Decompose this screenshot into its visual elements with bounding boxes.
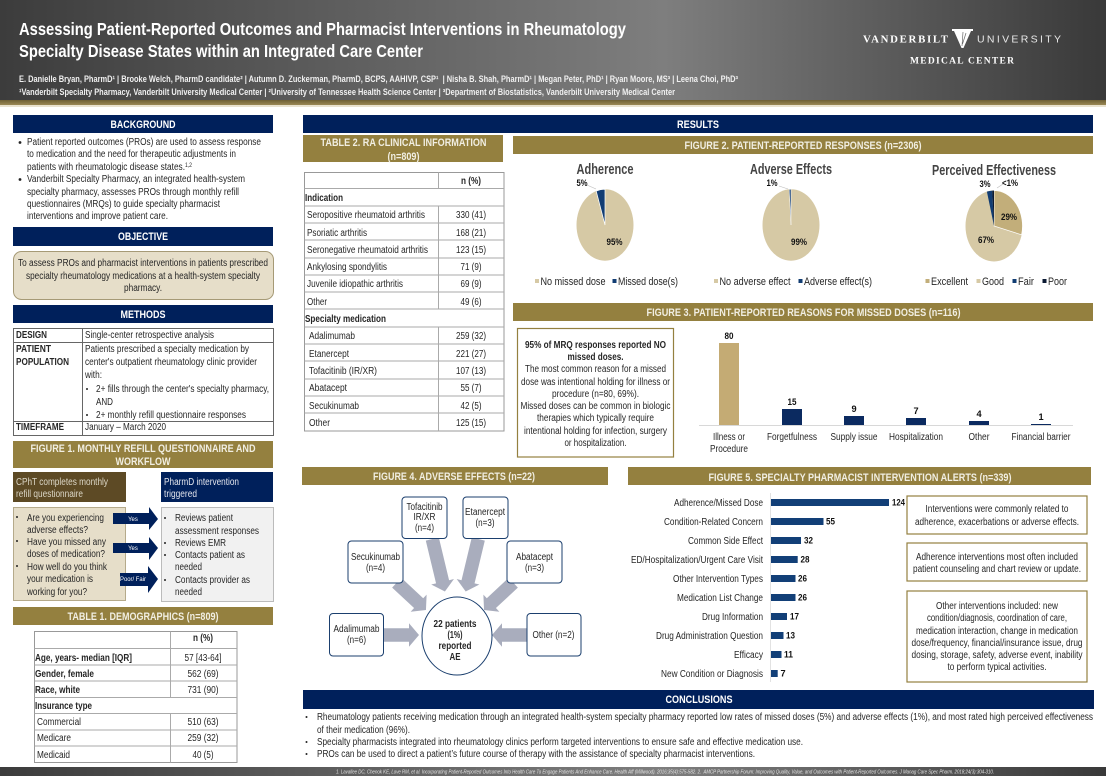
demographics table: Medicaid: [37, 750, 70, 761]
background text: interventions and improve patient care.: [27, 211, 168, 222]
node: Other: [527, 614, 581, 656]
conclusions text: Specialty pharmacists integrated into rheumatology clinics perform targeted interventions to ensure safe and effective medication use.: [317, 737, 803, 748]
heading: figure 1: WORKFLOW: [116, 456, 171, 468]
pie chart: perceived effectiveness: Fair: [1018, 276, 1034, 288]
clinical information table: 42 (5): [460, 401, 482, 412]
horizontal bar chart: intervention types: 26: [798, 592, 807, 602]
heading: methods: METHODS: [120, 309, 166, 321]
objective callout: specialty rheumatology medications at a health-system specialty: [26, 271, 260, 282]
clinical information table: 69 (9): [460, 279, 482, 290]
objective callout: pharmacy.: [124, 283, 162, 294]
panel: background: [13, 115, 273, 222]
title: Specialty Disease States within an Integrated Care Center: [19, 41, 423, 61]
node: Adalimumab: [330, 614, 384, 656]
demographics table: 40 (5): [192, 750, 214, 761]
footer references: 1. Lavallee DC, Chenok KE, Love RM, et al. Incorporating Patient-Reported Outcomes Into Health Care To Engage Patients And Enhance Care. Health Aff (Millwood). 2016;35(4):575-582. 2. AMCP Partnership Forum: Improving Quality, Value, and Outcomes with Patient-Reported Outcomes. J Manag Care Spec Pharm. 2018;24(3):304-310.: [336, 770, 994, 776]
background text: questionnaires (MRQs) to guide specialty pharmacist: [27, 199, 220, 210]
node: Etanercept: Etanercept: [465, 507, 505, 518]
header banner: [0, 0, 1106, 107]
pie chart: adverse effects: No adverse effect: [720, 276, 791, 288]
demographics table: Gender, female: [35, 669, 94, 680]
CPhT box: [13, 472, 126, 502]
callout: common interventions: Interventions were commonly related to: [926, 504, 1069, 515]
pharmacist actions: Contacts patient as: [175, 550, 245, 561]
heading: background: BACKGROUND: [110, 119, 176, 131]
callout: other interventions: condition/diagnosis, coordination of care,: [927, 613, 1067, 624]
node: Tofacitinib: Tofacitinib: [406, 502, 443, 513]
bar chart: reasons for missed doses: 7: [913, 406, 919, 416]
authors: E. Danielle Bryan, PharmD¹ | Brooke Welch, PharmD candidate² | Autumn D. Zuckerman, PharmD, BCPS, AAHIVP, CSP¹ | Nisha B. Shah, PharmD¹ | Megan Peter, PhD¹ | Ryan Moore, MS³ | Leena Choi, PhD³: [19, 74, 738, 84]
background text: specialty pharmacy, assesses PROs through monthly refill: [27, 187, 239, 198]
node: Adalimumab: Adalimumab: [334, 624, 380, 635]
heading: figure 5: FIGURE 5. SPECIALTY PHARMACIST INTERVENTION ALERTS (n=339): [708, 472, 1012, 484]
pie chart: perceived effectiveness: 67%: [978, 235, 994, 245]
heading: figure 1: [30, 443, 256, 468]
arrows into center: [383, 536, 527, 647]
arrow: yes adverse effects: Yes: [128, 517, 138, 523]
methods table: 2+ monthly refill questionnaire responses: [96, 410, 246, 421]
questionnaire questions: doses of medication?: [27, 549, 105, 560]
horizontal bar chart: intervention types: Medication List Change: [677, 593, 763, 604]
callout: adherence interventions: Adherence interventions most often included: [916, 552, 1078, 563]
horizontal bar chart: intervention types: Condition-Related Concern: [664, 517, 763, 528]
horizontal bar chart: intervention types: Adherence/Missed Dose: [674, 498, 763, 509]
panel: figure 1 workflow: [13, 441, 274, 602]
node: Tofacitinib: (n=4): [415, 523, 434, 534]
methods table: [14, 328, 274, 436]
bar chart: reasons for missed doses: 80: [724, 331, 734, 341]
pie chart: perceived effectiveness: Perceived Effectiveness: [932, 163, 1056, 179]
pie chart: adherence: Adherence: [576, 162, 634, 178]
pie chart: adverse effects: Adverse effect(s): [804, 276, 872, 288]
horizontal bar chart: intervention types: Drug Administration Question: [656, 631, 763, 642]
node: Adalimumab: (n=6): [347, 635, 366, 646]
clinical information table: Abatacept: [309, 383, 347, 394]
callout: adherence interventions: [907, 543, 1087, 581]
methods table: PATIENT: [16, 344, 51, 355]
heading: conclusions: CONCLUSIONS: [666, 694, 732, 706]
background text: patients with rheumatologic disease states.: [27, 162, 215, 173]
PharmD box: PharmD intervention: [164, 477, 239, 488]
pharmacist actions: assessment responses: [175, 526, 259, 537]
methods table: TIMEFRAME: [16, 422, 64, 433]
background text: Patient reported outcomes (PROs) are used to assess response: [27, 137, 261, 148]
center node: 22 patients: AE: [450, 652, 461, 663]
questionnaire questions: Have you missed any: [27, 537, 106, 548]
questionnaire questions: your medication is: [27, 574, 93, 585]
clinical information table: 125 (15): [456, 418, 486, 429]
background text: to medication and the need for therapeutic adjustments in: [27, 149, 236, 160]
questionnaire questions: [14, 508, 126, 600]
clinical information table: 107 (13): [456, 366, 486, 377]
conclusions text: of their medication (96%).: [317, 725, 410, 736]
heading: figure 1: FIGURE 1. MONTHLY REFILL QUESTIONNAIRE AND: [30, 443, 256, 455]
clinical information table: Indication: [305, 193, 343, 204]
pie chart: adherence: 5%: [576, 178, 588, 188]
bar chart: reasons for missed doses: 9: [851, 404, 857, 414]
clinical information table: Secukinumab: [309, 401, 359, 412]
methods table: DESIGN: [16, 330, 47, 341]
demographics table: 731 (90): [188, 685, 218, 696]
pie chart: adherence: [535, 162, 678, 288]
clinical information table: Ankylosing spondylitis: [307, 262, 387, 273]
CPhT box: CPhT completes monthly: [16, 477, 108, 488]
pie chart: adverse effects: 1%: [766, 178, 778, 188]
node: Other: Other (n=2): [532, 630, 574, 641]
node: Tofacitinib: [402, 497, 447, 538]
pharmacist actions: Reviews patient: [175, 513, 233, 524]
logo: Vanderbilt University Medical Center: [863, 29, 1061, 66]
clinical information table: Tofacitinib (IR/XR): [309, 366, 377, 377]
horizontal bar chart: intervention types: [631, 493, 906, 682]
conclusions text: PROs can be used to direct a patient’s future course of therapy with the assistance of specialty pharmacist interventions.: [317, 749, 755, 760]
clinical information table: 49 (6): [460, 297, 482, 308]
demographics table: 562 (69): [188, 669, 218, 680]
demographics table: 259 (32): [188, 733, 218, 744]
methods table: AND: [96, 397, 113, 408]
horizontal bar chart: intervention types: 11: [784, 650, 793, 660]
arrow: yes adverse effects: [113, 507, 158, 530]
missed doses callout: 95% of MRQ responses reported NO: [525, 340, 666, 351]
node: Abatacept: [507, 541, 562, 583]
heading: figure 4: FIGURE 4. ADVERSE EFFECTS (n=22): [373, 471, 535, 483]
affiliations: ¹Vanderbilt Specialty Pharmacy, Vanderbilt University Medical Center | ²University of Tennessee Health Science Center | ³Department of Biostatistics, Vanderbilt University Medical Center: [19, 87, 675, 97]
bar chart: reasons for missed doses: 15: [788, 397, 796, 407]
methods table: Single-center retrospective analysis: [85, 330, 214, 341]
logo: Vanderbilt University Medical Center: UNIVERSITY: [977, 34, 1061, 46]
demographics table: Age, years- median [IQR]: [35, 653, 132, 664]
clinical information table: Seronegative rheumatoid arthritis: [307, 245, 428, 256]
demographics table: Medicare: [37, 733, 71, 744]
clinical information table: Psoriatic arthritis: [307, 228, 367, 239]
node: Secukinumab: (n=4): [366, 563, 385, 574]
pie chart: adherence: 95%: [606, 237, 622, 247]
arrow: yes missed doses: [113, 537, 158, 560]
callout: other interventions: medication interaction, change in medication: [916, 626, 1078, 637]
questionnaire questions: How well do you think: [27, 562, 107, 573]
bar chart: reasons for missed doses: Procedure: [710, 444, 748, 455]
node: Secukinumab: Secukinumab: [351, 552, 400, 563]
panel: table 2 RA clinical information: [303, 135, 504, 431]
pie chart: adherence: Missed dose(s): [618, 276, 678, 288]
missed doses callout: dose was intentional holding for illness or: [521, 377, 671, 388]
heading: objective: OBJECTIVE: [118, 231, 168, 243]
methods table: POPULATION: [16, 357, 69, 368]
horizontal bar chart: intervention types: Efficacy: [734, 650, 763, 661]
horizontal bar chart: intervention types: 55: [826, 516, 835, 526]
results banner: RESULTS: [677, 119, 719, 131]
bar chart: reasons for missed doses: Forgetfulness: [767, 432, 817, 443]
PharmD box: triggered: [164, 489, 197, 500]
clinical information table: Seropositive rheumatoid arthritis: [307, 210, 425, 221]
center node: 22 patients: reported: [438, 641, 472, 652]
pie chart: perceived effectiveness: <1%: [1002, 178, 1018, 188]
demographics table: 57 [43-64]: [184, 653, 222, 664]
questionnaire questions: working for you?: [26, 587, 87, 598]
demographics table: n (%): [193, 633, 213, 644]
pharmacist actions: [162, 508, 274, 602]
pie chart: perceived effectiveness: 3%: [980, 179, 990, 189]
title: Assessing Patient-Reported Outcomes and Pharmacist Interventions in Rheumatology: [19, 19, 626, 39]
logo: Vanderbilt University Medical Center: MEDICAL CENTER: [910, 56, 1014, 66]
pie chart: perceived effectiveness: Good: [982, 276, 1004, 288]
title: [19, 19, 626, 61]
methods table: center's outpatient rheumatology clinic provider: [85, 357, 258, 368]
missed doses callout: Missed doses can be common in biologic: [520, 401, 671, 412]
clinical information table: n (%): [461, 176, 481, 187]
background text: Vanderbilt Specialty Pharmacy, an integrated health-system: [27, 174, 245, 185]
pharmacist actions: needed: [175, 587, 202, 598]
pharmacist actions: needed: [175, 562, 202, 573]
methods table: 2+ fills through the center's specialty pharmacy,: [96, 384, 269, 395]
heading: table 2: (n=809): [388, 151, 420, 163]
objective callout: To assess PROs and pharmacist interventions in patients prescribed: [18, 258, 268, 269]
questionnaire questions: Are you experiencing: [27, 513, 104, 524]
missed doses callout: The most common reason for a missed: [525, 364, 666, 375]
node: Tofacitinib: IR/XR: [414, 512, 436, 523]
panel: figure 5 pharmacist intervention alerts: [628, 467, 1091, 682]
pie chart: adverse effects: 99%: [791, 237, 807, 247]
bar chart: reasons for missed doses: 1: [1038, 412, 1044, 422]
demographics table: Commercial: [37, 717, 81, 728]
pie chart: adverse effects: Adverse Effects: [750, 162, 832, 178]
horizontal bar chart: intervention types: 28: [800, 554, 810, 564]
horizontal bar chart: intervention types: 17: [790, 612, 799, 622]
missed doses callout: [518, 328, 674, 457]
demographics table: Insurance type: [35, 701, 92, 712]
panel: conclusions: [303, 690, 1094, 760]
heading: table 2: [320, 137, 487, 163]
missed doses callout: or hospitalization.: [564, 438, 626, 449]
clinical information table: Juvenile idiopathic arthritis: [307, 279, 403, 290]
pie chart: adverse effects: [714, 162, 872, 288]
conclusions text: [306, 712, 1093, 760]
horizontal bar chart: intervention types: New Condition or Diagnosis: [661, 669, 763, 680]
callout: other interventions: Other interventions included: new: [936, 601, 1059, 612]
panel: objective: [13, 227, 274, 300]
missed doses callout: missed doses.: [568, 352, 624, 363]
bar chart: reasons for missed doses: Financial barrier: [1012, 432, 1071, 443]
footer references: [0, 767, 1106, 776]
bar chart: reasons for missed doses: 4: [976, 409, 982, 419]
bar chart: reasons for missed doses: Illness or: [713, 432, 746, 443]
background text: [19, 137, 261, 222]
PharmD box: [161, 472, 273, 502]
callout: other interventions: [907, 591, 1087, 682]
clinical information table: Etanercept: [309, 349, 349, 360]
horizontal bar chart: intervention types: 32: [804, 536, 813, 546]
bar chart: reasons for missed doses: Hospitalization: [889, 432, 943, 443]
clinical information table: Specialty medication: [305, 314, 386, 325]
demographics table: [34, 632, 237, 762]
arrow: poor or fair: Poor/ Fair: [120, 577, 146, 583]
clinical information table: Other: [307, 297, 328, 308]
heading: figure 3: FIGURE 3. PATIENT-REPORTED REASONS FOR MISSED DOSES (n=116): [646, 307, 961, 319]
logo: Vanderbilt University Medical Center: VANDERBILT: [863, 34, 949, 46]
node: Etanercept: (n=3): [476, 518, 494, 529]
clinical information table: 259 (32): [456, 331, 486, 342]
bar chart: reasons for missed doses: [699, 331, 1073, 455]
missed doses callout: therapies which typically require: [537, 413, 654, 424]
heading: table 2: TABLE 2. RA CLINICAL INFORMATION: [320, 137, 487, 149]
callout: common interventions: [907, 496, 1087, 534]
horizontal bar chart: intervention types: 124: [892, 498, 906, 508]
panel: methods: [13, 305, 274, 436]
clinical information table: Other: [309, 418, 331, 429]
clinical information table: 71 (9): [460, 262, 482, 273]
methods table: January – March 2020: [85, 422, 166, 433]
center node: 22 patients: [422, 597, 492, 675]
demographics table: 510 (63): [188, 717, 218, 728]
arrow: poor or fair: [120, 566, 158, 593]
bar chart: reasons for missed doses: Supply issue: [830, 432, 878, 443]
bar chart: reasons for missed doses: Other: [968, 432, 990, 443]
pie chart: perceived effectiveness: [926, 163, 1067, 288]
objective callout: [14, 252, 274, 300]
heading: figure 2: FIGURE 2. PATIENT-REPORTED RESPONSES (n=2306): [684, 140, 922, 152]
center node: 22 patients: (1%): [448, 630, 462, 641]
horizontal bar chart: intervention types: Other Intervention Types: [673, 574, 763, 585]
panel: figure 3 reasons for missed doses: [513, 303, 1093, 457]
horizontal bar chart: intervention types: Common Side Effect: [688, 536, 763, 547]
panel: figure 4 adverse effects: [302, 467, 608, 675]
pie chart: adherence: No missed dose: [540, 276, 606, 288]
horizontal bar chart: intervention types: 7: [780, 668, 786, 678]
pie chart: perceived effectiveness: 29%: [1001, 212, 1017, 222]
CPhT box: refill questionnaire: [16, 489, 83, 500]
clinical information table: 55 (7): [460, 383, 482, 394]
node: Abatacept: Abatacept: [516, 552, 553, 563]
panel: table 1 demographics: [13, 607, 273, 762]
clinical information table: 330 (41): [456, 210, 486, 221]
node: Abatacept: (n=3): [525, 563, 544, 574]
pie chart: perceived effectiveness: Excellent: [931, 276, 969, 288]
horizontal bar chart: intervention types: 26: [798, 574, 807, 584]
methods table: with:: [84, 370, 102, 381]
results banner: [303, 115, 1093, 133]
node: Secukinumab: [348, 541, 403, 583]
pharmacist actions: Contacts provider as: [175, 575, 250, 586]
horizontal bar chart: intervention types: Drug Information: [702, 612, 763, 623]
clinical information table: 123 (15): [456, 245, 486, 256]
clinical information table: Adalimumab: [309, 331, 355, 342]
horizontal bar chart: intervention types: ED/Hospitalization/Urgent Care Visit: [631, 555, 763, 566]
pharmacist actions: Reviews EMR: [175, 538, 226, 549]
callout: other interventions: to perform typical activities.: [948, 662, 1046, 673]
questionnaire questions: adverse effects?: [27, 525, 88, 536]
arrow: yes missed doses: Yes: [128, 546, 138, 552]
heading: table 1: TABLE 1. DEMOGRAPHICS (n=809): [68, 611, 219, 623]
clinical information table: 168 (21): [456, 228, 486, 239]
missed doses callout: procedure (n=80, 69%).: [552, 389, 639, 400]
clinical information table: 221 (27): [456, 349, 486, 360]
center node: 22 patients: 22 patients: [434, 619, 477, 630]
missed doses callout: intentional holding for infection, surgery: [524, 426, 667, 437]
methods table: Patients prescribed a specialty medication by: [85, 344, 249, 355]
background text: 1,2: [185, 163, 193, 169]
node: Etanercept: [463, 497, 508, 538]
panel: figure 2 patient-reported responses: [513, 136, 1093, 288]
demographics table: Race, white: [35, 685, 80, 696]
clinical information table: [304, 172, 504, 431]
horizontal bar chart: intervention types: 13: [786, 630, 795, 640]
pie chart: perceived effectiveness: Poor: [1048, 276, 1067, 288]
